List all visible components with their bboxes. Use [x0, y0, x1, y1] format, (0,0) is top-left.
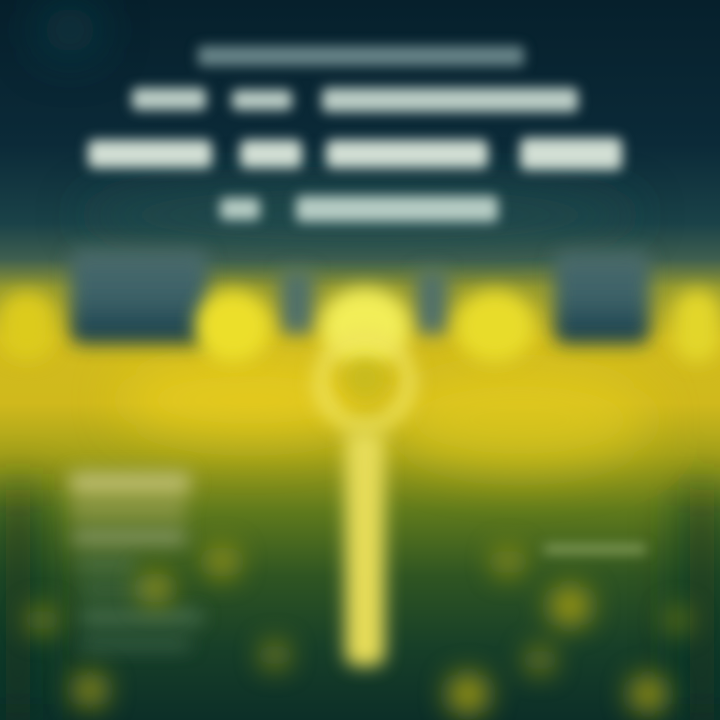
title line 4	[220, 196, 498, 222]
light 4	[455, 290, 535, 362]
key head centre	[345, 358, 385, 398]
key stem	[345, 430, 385, 666]
decorative glowing dots	[30, 547, 688, 714]
key head	[321, 338, 409, 426]
title line 2	[132, 88, 578, 112]
light 2	[195, 290, 271, 362]
panel: right card	[554, 252, 650, 344]
text block: left column	[70, 472, 202, 648]
title line 1	[198, 46, 524, 66]
panel: centre-right card	[416, 270, 448, 334]
panel: centre-left card	[280, 270, 314, 334]
glowing lights row	[0, 288, 720, 364]
light 1	[0, 292, 54, 360]
panel: left card	[70, 250, 208, 344]
light 3	[321, 288, 409, 364]
title	[88, 46, 622, 222]
text block: right column	[544, 545, 646, 553]
icon: central key shape	[321, 338, 409, 666]
light 5	[674, 290, 720, 362]
title line 3	[88, 138, 622, 170]
